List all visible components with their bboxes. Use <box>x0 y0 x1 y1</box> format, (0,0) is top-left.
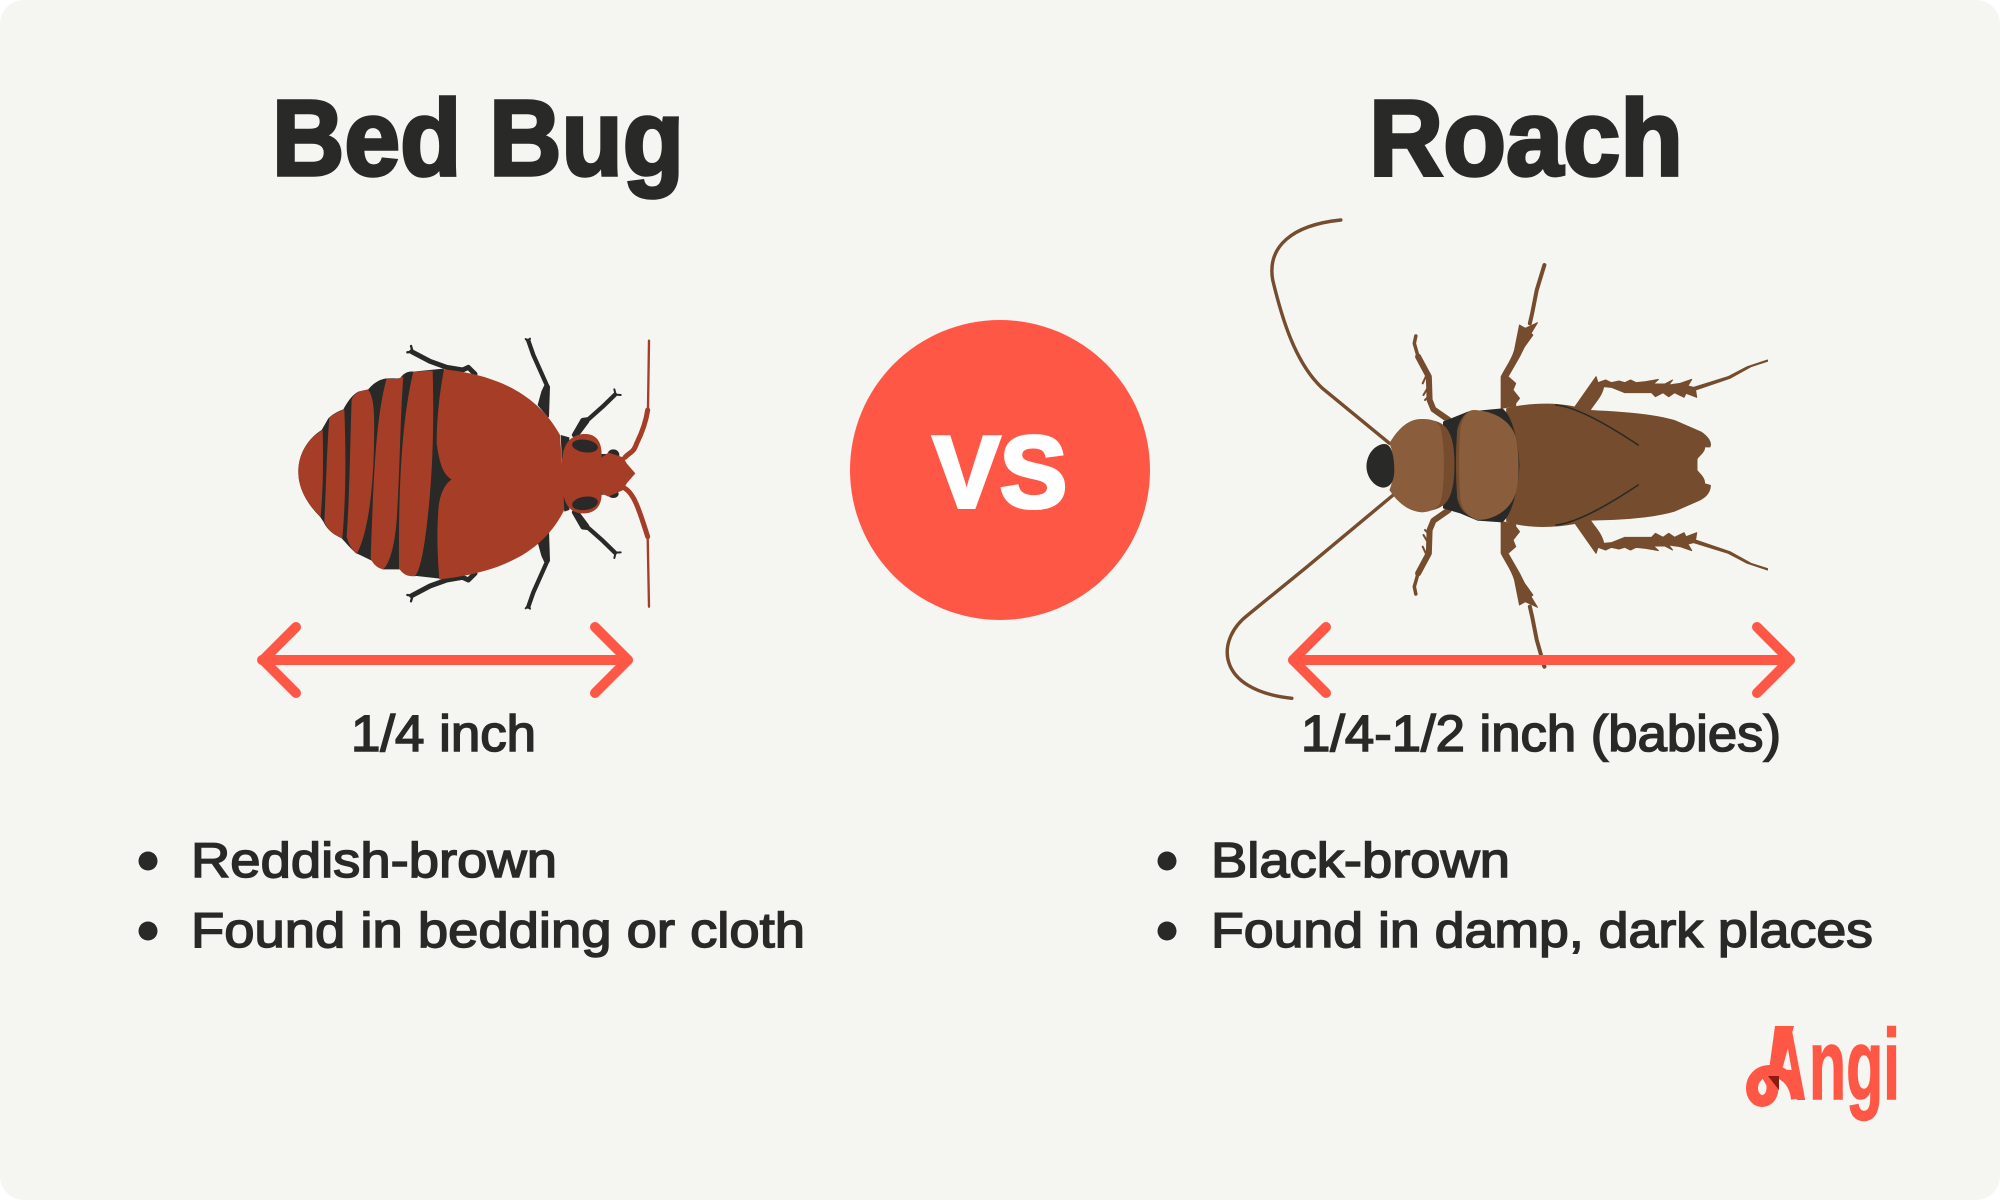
bed bug lower legs <box>407 512 621 609</box>
logo letters ngi: ngi <box>1809 1009 1900 1121</box>
logo letter A: A <box>1768 1009 1806 1121</box>
label: roach size: 1/4-1/2 inch (babies) <box>1301 705 1781 762</box>
vs text: VS <box>933 417 1067 529</box>
fact: colour: Reddish-brown <box>191 834 557 888</box>
illustration: roach <box>1227 220 1767 698</box>
fact: habitat: Found in bedding or cloth <box>191 904 805 958</box>
heading: Roach: Roach <box>1369 77 1683 198</box>
roach wings <box>1506 404 1711 527</box>
bed bug neck <box>561 435 569 512</box>
logo loop <box>1752 1071 1797 1101</box>
roach rear pronotum shadow <box>1430 420 1454 511</box>
heading: Bed Bug: Bed Bug <box>272 77 684 198</box>
bed bug antennae <box>625 341 649 607</box>
bed bug head dark parts <box>598 449 619 498</box>
vs badge <box>850 320 1150 620</box>
roach upper legs <box>1414 265 1767 420</box>
arrow: roach size <box>1293 627 1790 693</box>
fact: habitat: Found in damp, dark places <box>1211 904 1873 958</box>
fact: colour: Black-brown <box>1211 834 1510 888</box>
logo patch <box>1762 1066 1792 1103</box>
bed bug eyes <box>571 438 599 512</box>
logo: Angi <box>1752 1009 1900 1121</box>
roach dark midsection <box>1443 408 1520 522</box>
logo A left stem <box>1769 1026 1794 1070</box>
vs circle <box>850 320 1150 620</box>
roach antennae <box>1227 220 1393 698</box>
roach wing lines <box>1556 405 1638 525</box>
label: bed bug size: 1/4 inch <box>351 705 536 762</box>
roach back shield <box>1456 410 1479 520</box>
roach lower legs <box>1414 510 1767 667</box>
bullet <box>138 922 158 940</box>
bed bug head <box>600 453 635 497</box>
bed bug body segments <box>298 369 565 579</box>
arrow: bed bug size <box>262 627 628 693</box>
bullet <box>1158 922 1176 940</box>
roach back shield light <box>1459 410 1519 520</box>
illustration: bed bug <box>298 339 649 609</box>
bed bug thorax <box>561 434 602 513</box>
roach head <box>1366 444 1394 488</box>
bullet <box>1158 852 1176 870</box>
roach facts <box>1158 834 1873 958</box>
roach front shield <box>1389 419 1444 512</box>
bed bug upper legs <box>407 339 621 435</box>
bed bug facts <box>138 834 805 958</box>
bed bug abdomen dark base <box>298 369 480 579</box>
bullet <box>138 852 158 870</box>
logo fold <box>1768 1076 1779 1090</box>
